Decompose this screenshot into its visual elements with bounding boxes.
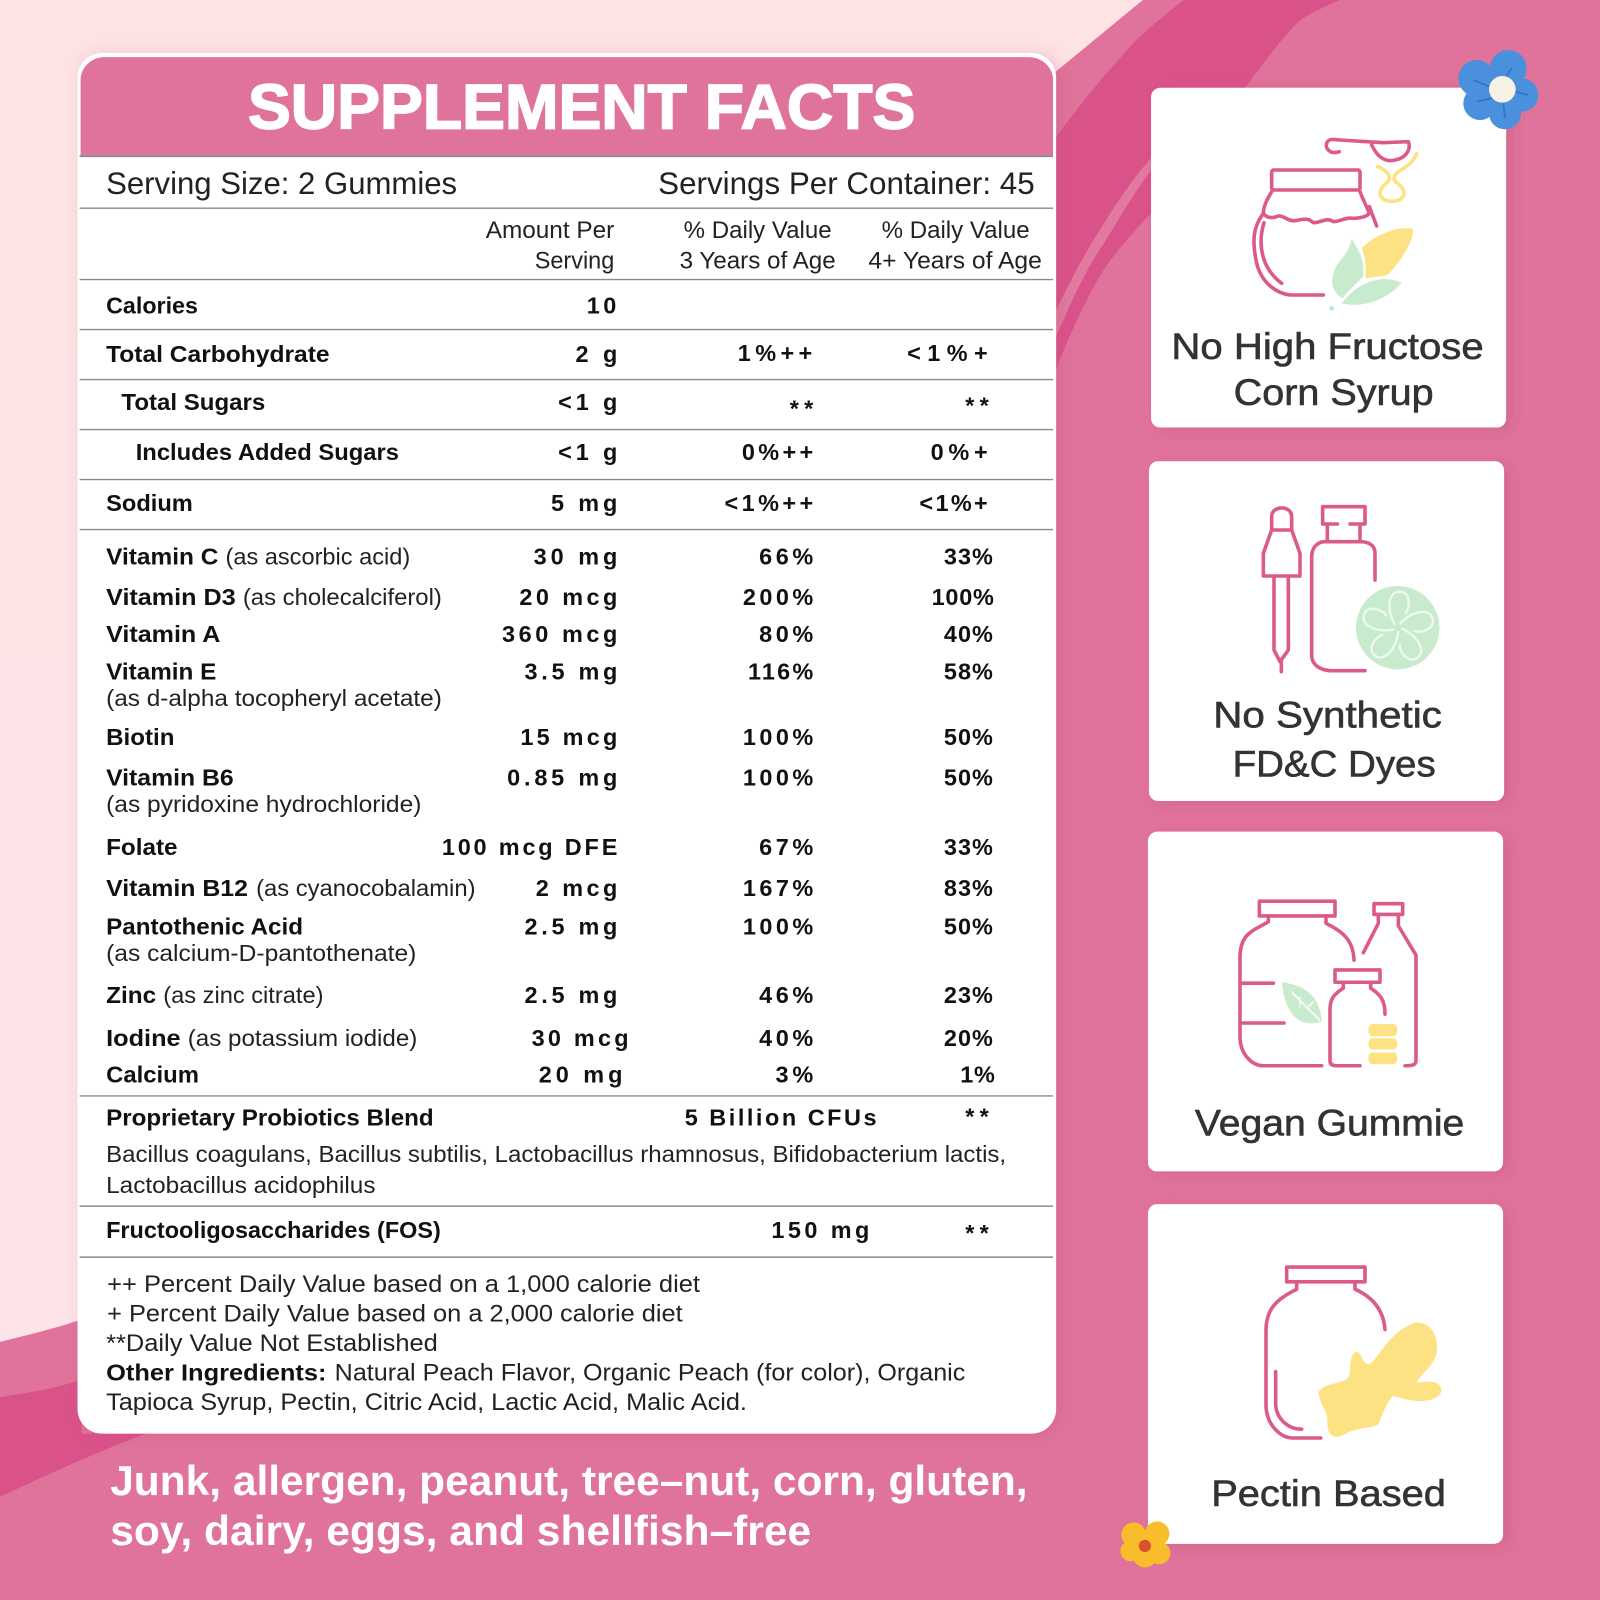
row: vitamin D3: Vitamin D3 bbox=[106, 584, 236, 610]
row: calcium: 1% bbox=[960, 1062, 995, 1088]
row: sodium: 5 mg bbox=[551, 490, 617, 516]
row: total sugars bbox=[121, 389, 990, 421]
row: FOS: ** bbox=[965, 1220, 990, 1246]
row: folate: 67% bbox=[759, 834, 813, 860]
row: biotin: 15 mcg bbox=[520, 724, 617, 750]
row: vitamin E: 3.5 mg bbox=[524, 659, 617, 685]
card title: FD&C Dyes bbox=[1233, 744, 1436, 785]
row: iodine: 40% bbox=[759, 1025, 813, 1051]
row: pantothenic acid: (as calcium-D-pantothenate) bbox=[106, 940, 416, 966]
row: probiotics blend: 5 Billion CFUs bbox=[685, 1105, 877, 1131]
row: iodine: 20% bbox=[944, 1025, 993, 1051]
row: iodine bbox=[106, 1025, 993, 1051]
row: calories: Calories bbox=[106, 292, 198, 318]
row: vitamin B6: 50% bbox=[944, 765, 993, 791]
row: calcium: 3% bbox=[776, 1062, 813, 1088]
row: total sugars: <1 g bbox=[558, 389, 617, 415]
row: total carbohydrate: Total Carbohydrate bbox=[106, 341, 330, 367]
row: vitamin E bbox=[106, 659, 993, 711]
row: sodium: Sodium bbox=[106, 490, 193, 516]
row: vitamin B6: Vitamin B6 bbox=[106, 765, 234, 791]
row: pantothenic acid bbox=[106, 914, 993, 966]
row: zinc: 23% bbox=[944, 982, 993, 1008]
row: vitamin E: (as d-alpha tocopheryl acetate) bbox=[106, 685, 442, 711]
row: zinc bbox=[106, 982, 993, 1008]
row: iodine: (as potassium iodide) bbox=[188, 1025, 417, 1051]
row: vitamin C: 66% bbox=[759, 543, 813, 569]
row: vitamin B12: Vitamin B12 bbox=[106, 875, 248, 901]
row: probiotics blend: Proprietary Probiotics Blend bbox=[106, 1105, 434, 1131]
column headers: Serving bbox=[535, 247, 614, 274]
row: vitamin E: 58% bbox=[944, 659, 993, 685]
row: added sugars bbox=[136, 439, 988, 465]
row: calcium: 20 mg bbox=[539, 1062, 622, 1088]
footnotes and other ingredients: ++ Percent Daily Value based on a 1,000 calorie diet bbox=[107, 1271, 700, 1298]
row: iodine: 30 mcg bbox=[532, 1025, 629, 1051]
row: vitamin B12: 83% bbox=[944, 875, 993, 901]
card title: No High Fructose bbox=[1171, 326, 1484, 367]
row: biotin bbox=[106, 724, 993, 750]
row: biotin: 100% bbox=[743, 724, 813, 750]
card title: Pectin Based bbox=[1211, 1473, 1446, 1514]
row: vitamin A: 40% bbox=[944, 621, 993, 647]
row: FOS bbox=[106, 1217, 990, 1246]
column headers bbox=[486, 217, 1042, 274]
row: added sugars: <1 g bbox=[558, 439, 617, 465]
footnotes and other ingredients: + Percent Daily Value based on a 2,000 calorie diet bbox=[107, 1300, 683, 1327]
column headers: % Daily Value bbox=[684, 217, 832, 244]
row: vitamin B6 bbox=[106, 765, 993, 817]
row: vitamin D3 bbox=[106, 584, 994, 610]
row: zinc: (as zinc citrate) bbox=[163, 982, 323, 1008]
row: vitamin A: Vitamin A bbox=[106, 621, 220, 647]
icon: honey jar with corn bbox=[1254, 139, 1417, 311]
footnotes and other ingredients: Other Ingredients: bbox=[106, 1360, 327, 1386]
row: pantothenic acid: 50% bbox=[944, 914, 993, 940]
row: biotin: Biotin bbox=[106, 724, 174, 750]
row: zinc: 46% bbox=[759, 982, 813, 1008]
icon: jar with ginger bbox=[1266, 1267, 1442, 1438]
panel: supplement facts bbox=[78, 53, 1056, 1434]
row: vitamin A bbox=[106, 621, 993, 647]
row: vitamin B6: 100% bbox=[743, 765, 813, 791]
column headers: 4+ Years of Age bbox=[868, 247, 1042, 274]
card title: Vegan Gummie bbox=[1195, 1103, 1464, 1144]
row: calories bbox=[106, 292, 616, 318]
row: vitamin B12: 167% bbox=[743, 875, 813, 901]
row: total carbohydrate bbox=[106, 340, 988, 367]
row: FOS: Fructooligosaccharides (FOS) bbox=[106, 1217, 441, 1243]
footnotes and other ingredients bbox=[106, 1271, 965, 1416]
row: sodium: <1%+ bbox=[919, 490, 988, 516]
row: added sugars: 0%+ bbox=[931, 439, 988, 465]
row: sodium: <1%++ bbox=[724, 490, 813, 516]
icon: blue flower bbox=[1458, 50, 1538, 129]
row: vitamin C bbox=[106, 543, 993, 569]
row: pantothenic acid: 2.5 mg bbox=[524, 914, 617, 940]
row: total sugars: Total Sugars bbox=[121, 389, 265, 415]
card title: Corn Syrup bbox=[1234, 372, 1434, 413]
header band bbox=[81, 57, 1053, 155]
row: folate bbox=[106, 834, 993, 860]
row: folate: 33% bbox=[944, 834, 993, 860]
row: vitamin D3: 100% bbox=[932, 584, 994, 610]
row: total sugars: ** bbox=[965, 392, 990, 418]
icon: dropper and bottle bbox=[1263, 507, 1439, 672]
row: vitamin C: Vitamin C bbox=[106, 543, 218, 569]
row: probiotics blend: ** bbox=[965, 1103, 990, 1129]
row: vitamin D3: 200% bbox=[743, 584, 813, 610]
row: total sugars: ** bbox=[790, 395, 814, 421]
card title bbox=[1213, 695, 1442, 785]
icon: vegan jars bbox=[1240, 901, 1416, 1066]
row: vitamin E: 116% bbox=[748, 659, 813, 685]
row: vitamin B6: 0.85 mg bbox=[507, 765, 617, 791]
card title bbox=[1171, 326, 1484, 413]
footnotes and other ingredients: Tapioca Syrup, Pectin, Citric Acid, Lactic Acid, Malic Acid. bbox=[106, 1389, 747, 1416]
column headers: % Daily Value bbox=[882, 217, 1030, 244]
row: vitamin B12: (as cyanocobalamin) bbox=[256, 875, 476, 901]
title: SUPPLEMENT FACTS bbox=[248, 73, 915, 143]
row: probiotics blend: Lactobacillus acidophilus bbox=[106, 1172, 376, 1198]
row: biotin: 50% bbox=[944, 724, 993, 750]
row: probiotics blend: Bacillus coagulans, Bacillus subtilis, Lactobacillus rhamnosus, Bifidobacterium lactis, bbox=[106, 1141, 1006, 1167]
row: iodine: Iodine bbox=[106, 1025, 181, 1051]
row: vitamin D3: (as cholecalciferol) bbox=[243, 584, 442, 610]
row: added sugars: Includes Added Sugars bbox=[136, 439, 399, 465]
column headers: 3 Years of Age bbox=[680, 247, 836, 274]
row: added sugars: 0%++ bbox=[742, 439, 813, 465]
row: pantothenic acid: Pantothenic Acid bbox=[106, 914, 303, 940]
row: calories: 10 bbox=[587, 292, 616, 318]
row: vitamin E: Vitamin E bbox=[106, 659, 216, 685]
row: vitamin C: 33% bbox=[944, 543, 993, 569]
serving info: Servings Per Container: 45 bbox=[658, 165, 1035, 201]
allergen statement: Junk, allergen, peanut, tree–nut, corn, gluten, bbox=[110, 1457, 1028, 1504]
serving info bbox=[106, 165, 1035, 201]
row: vitamin A: 80% bbox=[759, 621, 813, 647]
serving info: Serving Size: 2 Gummies bbox=[106, 165, 457, 201]
row: FOS: 150 mg bbox=[771, 1217, 869, 1243]
footnotes and other ingredients: Natural Peach Flavor, Organic Peach (for color), Organic bbox=[335, 1360, 965, 1387]
row: folate: 100 mcg DFE bbox=[442, 834, 617, 860]
row: folate: Folate bbox=[106, 834, 178, 860]
row: vitamin C: (as ascorbic acid) bbox=[226, 543, 410, 569]
row: vitamin B12 bbox=[106, 875, 993, 901]
column headers: Amount Per bbox=[486, 217, 614, 244]
row: pantothenic acid: 100% bbox=[743, 914, 813, 940]
card: vegan gummie bbox=[1148, 832, 1503, 1171]
icon: yellow flower bbox=[1120, 1521, 1170, 1567]
row: vitamin B6: (as pyridoxine hydrochloride) bbox=[106, 791, 421, 817]
card: no synthetic dyes bbox=[1149, 461, 1504, 801]
card: pectin based bbox=[1148, 1204, 1503, 1544]
row: vitamin B12: 2 mcg bbox=[536, 875, 617, 901]
row: calcium: Calcium bbox=[106, 1062, 199, 1088]
allergen statement: soy, dairy, eggs, and shellfish–free bbox=[110, 1507, 811, 1554]
row: total carbohydrate: 1%++ bbox=[738, 340, 812, 366]
card: no high fructose corn syrup bbox=[1151, 88, 1506, 428]
row: vitamin D3: 20 mcg bbox=[519, 584, 617, 610]
row: probiotics blend bbox=[106, 1103, 1006, 1198]
footnotes and other ingredients: **Daily Value Not Established bbox=[106, 1330, 438, 1357]
allergen statement bbox=[110, 1457, 1028, 1554]
row: total carbohydrate: 2 g bbox=[576, 341, 617, 367]
row: sodium bbox=[106, 490, 988, 516]
row: calcium bbox=[106, 1062, 995, 1088]
row: zinc: Zinc bbox=[106, 982, 156, 1008]
row: total carbohydrate: <1%+ bbox=[907, 340, 988, 366]
row: vitamin A: 360 mcg bbox=[502, 621, 617, 647]
row: zinc: 2.5 mg bbox=[524, 982, 617, 1008]
card title: No Synthetic bbox=[1213, 695, 1442, 736]
table rules bbox=[80, 156, 1053, 1257]
row: vitamin C: 30 mg bbox=[534, 543, 617, 569]
